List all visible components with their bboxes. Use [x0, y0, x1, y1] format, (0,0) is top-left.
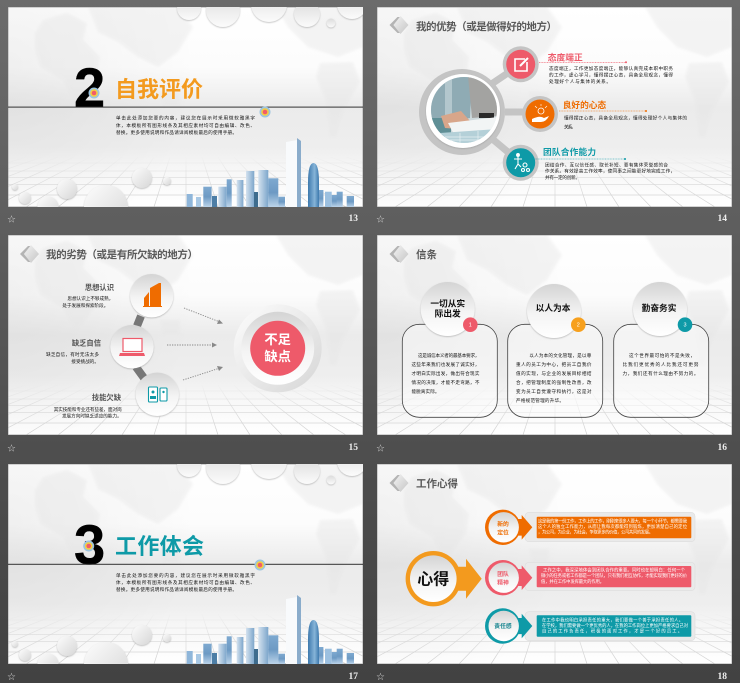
body text: 体，本模板所有图形线条及其相应素材均可自由编辑、改色、 [116, 579, 255, 586]
item 1 text: 处理好个人与集体的关系。 [549, 78, 611, 85]
label: 思想认识 [85, 283, 115, 292]
card 2: 以人为本的文化管理，是以尊 [529, 352, 592, 359]
card 2: 以人为本 [536, 302, 571, 313]
row 3 responsibility: 在工作中我也明白承担责任的重大，我们要做一个善于承担责任的人。 [542, 616, 683, 624]
item 3 text: 团结合作、互以信任感、取长补短、要有集体荣誉感的合 [545, 162, 668, 168]
body text: 单击此处添加您要的内容，建议您在展示时采用微软雅黑字 [116, 572, 255, 579]
row 2 team spirit: 精神 [497, 578, 509, 586]
row 1 positioning: 定位 [497, 528, 509, 536]
item 3 text: 团队合作能力 [543, 146, 596, 157]
icon: hand and bulb [532, 104, 549, 122]
card 2 [508, 284, 603, 417]
page number 14: 14 [718, 214, 727, 224]
skills text [54, 406, 122, 420]
central shortfall circle [234, 304, 322, 392]
footer star: ☆ [376, 214, 385, 226]
panel: slide 14 strengths 我的优势 [376, 7, 732, 222]
panel: slide 15 weaknesses 我的劣势 [0, 235, 506, 454]
item 2 text: 关系。 [564, 124, 576, 130]
target dot on number [83, 540, 94, 552]
page number 13: 13 [348, 214, 358, 224]
central shortfall circle: 缺点 [264, 348, 291, 364]
central shortfall circle: 不足 [264, 332, 291, 347]
target dot on line [260, 106, 270, 118]
footer star: ☆ [376, 444, 385, 454]
icon: two phones [148, 387, 167, 402]
skills text: 发展方向时缺乏适应的能力。 [62, 412, 122, 420]
page number 18: 18 [718, 672, 727, 682]
card 1: 这是诚信本义者的最基本要求， [418, 352, 480, 359]
card 1: 际出发 [435, 308, 461, 318]
row 1 positioning: 这是我的第一份工作，工作上的工作，刚刚来很多人要大，每一个小环节，都需要我 [538, 518, 688, 524]
item 2 text: 良好的心态 [563, 99, 607, 110]
card 2: 严格规范管理的升华。 [516, 397, 564, 404]
footer star: ☆ [7, 672, 16, 683]
section number 3: 3 [74, 513, 105, 576]
photo of business people [430, 76, 498, 144]
row 2 team spirit: 团队 [497, 570, 509, 578]
label: 技能欠缺 [92, 393, 122, 402]
dotted arrows [167, 308, 220, 380]
row 1 positioning [485, 510, 695, 545]
node 1: attitude [503, 46, 539, 82]
card 1: 才明白实际出发，做出符合现实 [412, 370, 480, 377]
row 2 team spirit [485, 560, 695, 595]
section number 2: 2 [74, 56, 105, 119]
card 1 [402, 282, 497, 417]
slide heading: 我的优势（或是做得好的地方） [416, 20, 557, 33]
item 2 text: 懂得摆正心态，具备全局观念，懂得处理好个人与集体的 [564, 114, 687, 122]
row 3 responsibility: 自己的工作负责任，积极的面对工作，才是一个好的员工。 [542, 628, 682, 634]
card 1: 情况的决策，才能不走弯路，不 [412, 379, 480, 386]
card 2: 重人的员工为中心，把员工自我价 [516, 361, 592, 368]
row 2 team spirit: 值，并在工作中发挥最大的作用。 [541, 578, 604, 585]
row 1 positioning: 这个人的独立工作能力，从而让我每次都能得到锻炼，更加清楚自己的定位 [538, 523, 688, 530]
icon: orange buildings [143, 283, 162, 307]
item 3 text [533, 146, 675, 181]
header icon [390, 16, 408, 34]
header icon [20, 245, 39, 263]
card 2: 合，把管理制度的强制性改善，改 [516, 379, 592, 386]
card 3: 勤奋务实 [642, 302, 677, 313]
card 3: 这个世界最可怕的不是失败， [629, 352, 695, 359]
item 1 text: 态度端正 [548, 52, 583, 62]
footer star: ☆ [7, 214, 16, 226]
central insight arrow [406, 551, 482, 606]
skills text: 其实技能和专业还有些差，面对岗 [54, 406, 122, 413]
row 3 responsibility: 在学校，我们需要做一个更优秀的人，在我的工作岗位上更加严格要求自己对 [542, 622, 689, 629]
card 1: 一切从实 [430, 298, 465, 308]
panel: slide 13 section cover 自我评价 [0, 0, 506, 229]
icon: person and gears [514, 154, 530, 172]
row 2 team spirit: 工作之中，我深深地体会到团队合作的重要。同时也在想明白：任何一个 [543, 566, 686, 574]
slide heading: 信条 [416, 248, 438, 261]
item 1 text: 的工作，虚心学习，懂得摆正心态，具备全局观念，懂得 [549, 72, 673, 78]
node: thinking [85, 274, 173, 317]
item 1 text: 态度端正，工作更加态度端正，能够认真完成本职中职务 [549, 65, 673, 72]
body text: 替换。更多使用说明和作品请详阅模板最后的使用手册。 [116, 129, 237, 136]
slide heading: 工作心得 [416, 477, 458, 490]
node: confidence [72, 325, 154, 368]
item 2 text [559, 99, 687, 130]
icon: laptop [119, 338, 145, 356]
body text: 替换。更多使用说明和作品请详阅模板最后的使用手册。 [116, 586, 237, 593]
body text [116, 572, 255, 593]
section title: 自我评价 [115, 77, 203, 102]
card 1: 这些年来我们也发展了诚实好， [412, 361, 480, 368]
body text: 单击此处添加您要的内容，建议您在展示时采用微软雅黑字 [116, 114, 255, 122]
panel: slide 17 section cover 工作体会 [0, 443, 506, 683]
panel: slide 16 credo 信条 [235, 235, 740, 454]
item 3 text: 作关系。有效提高工作效率，使同事之间能更好地完成工作， [545, 168, 675, 174]
main photo ring [419, 69, 505, 155]
footer star: ☆ [7, 444, 16, 454]
header icon [390, 474, 408, 492]
card 1: 能脱离实际。 [412, 388, 440, 395]
panel: slide 18 work insights 工作心得 [235, 464, 740, 683]
card 2: 变为员工自觉遵守和执行，这是对 [516, 388, 592, 395]
card 3: 比我们更优秀的人比我还可更努 [622, 361, 699, 368]
row 2 team spirit: 微小的任务或者工作都是一个团队，只有我们相互协作，才能实现我们更好的价 [541, 572, 688, 579]
card 2: 值的实现，与企业的发展目标相结 [516, 370, 592, 377]
divider line [8, 564, 363, 565]
target dot on number [88, 88, 100, 98]
section title: 工作体会 [115, 534, 204, 559]
divider line [8, 107, 363, 108]
row 1 positioning: 新的 [497, 520, 509, 528]
arrow heads [212, 320, 223, 371]
card 3: 3 [683, 323, 687, 329]
confidence text [46, 351, 99, 365]
circle connectors [136, 316, 144, 378]
card 2: 2 [577, 323, 580, 329]
item 1 text [539, 52, 673, 85]
header icon [390, 245, 408, 263]
item 3 text: 并有一定的创新。 [545, 174, 580, 181]
row 3 responsibility: 责任感 [494, 622, 512, 630]
page number 16: 16 [718, 443, 727, 453]
card 1: 1 [469, 323, 472, 329]
card 3: 力，我们还有什么理由不努力的。 [622, 370, 698, 377]
node 3: teamwork [503, 145, 539, 181]
icon: edit [515, 58, 528, 71]
footer star: ☆ [376, 672, 385, 683]
target dot on line [254, 560, 266, 570]
connectors [490, 64, 540, 163]
card 3 [614, 282, 709, 417]
thinking text [62, 295, 113, 309]
node: skills [92, 373, 179, 416]
slide heading: 我的劣势（或是有所欠缺的地方） [46, 248, 198, 261]
body text: 体，本模板所有图形线条及其相应素材均可自由编辑、改色、 [116, 122, 255, 129]
body text [116, 114, 255, 136]
page number 15: 15 [348, 443, 358, 453]
label: 缺乏自信 [72, 338, 101, 348]
page number 17: 17 [348, 672, 358, 682]
confidence text: 缺乏自信，有时无法太多 [46, 351, 99, 358]
row 3 responsibility [485, 608, 695, 644]
central insight arrow: 心得 [417, 570, 449, 588]
thinking text: 思想认识上不够成熟， [67, 295, 113, 302]
confidence text: 接受挑战的。 [71, 358, 99, 365]
thinking text: 处于发展和探索阶段。 [62, 302, 108, 309]
row 1 positioning: ，为公司，为企业，为社会，争取更多的价值，公司共同的发展。 [538, 528, 653, 536]
node 2: mindset [522, 96, 558, 132]
